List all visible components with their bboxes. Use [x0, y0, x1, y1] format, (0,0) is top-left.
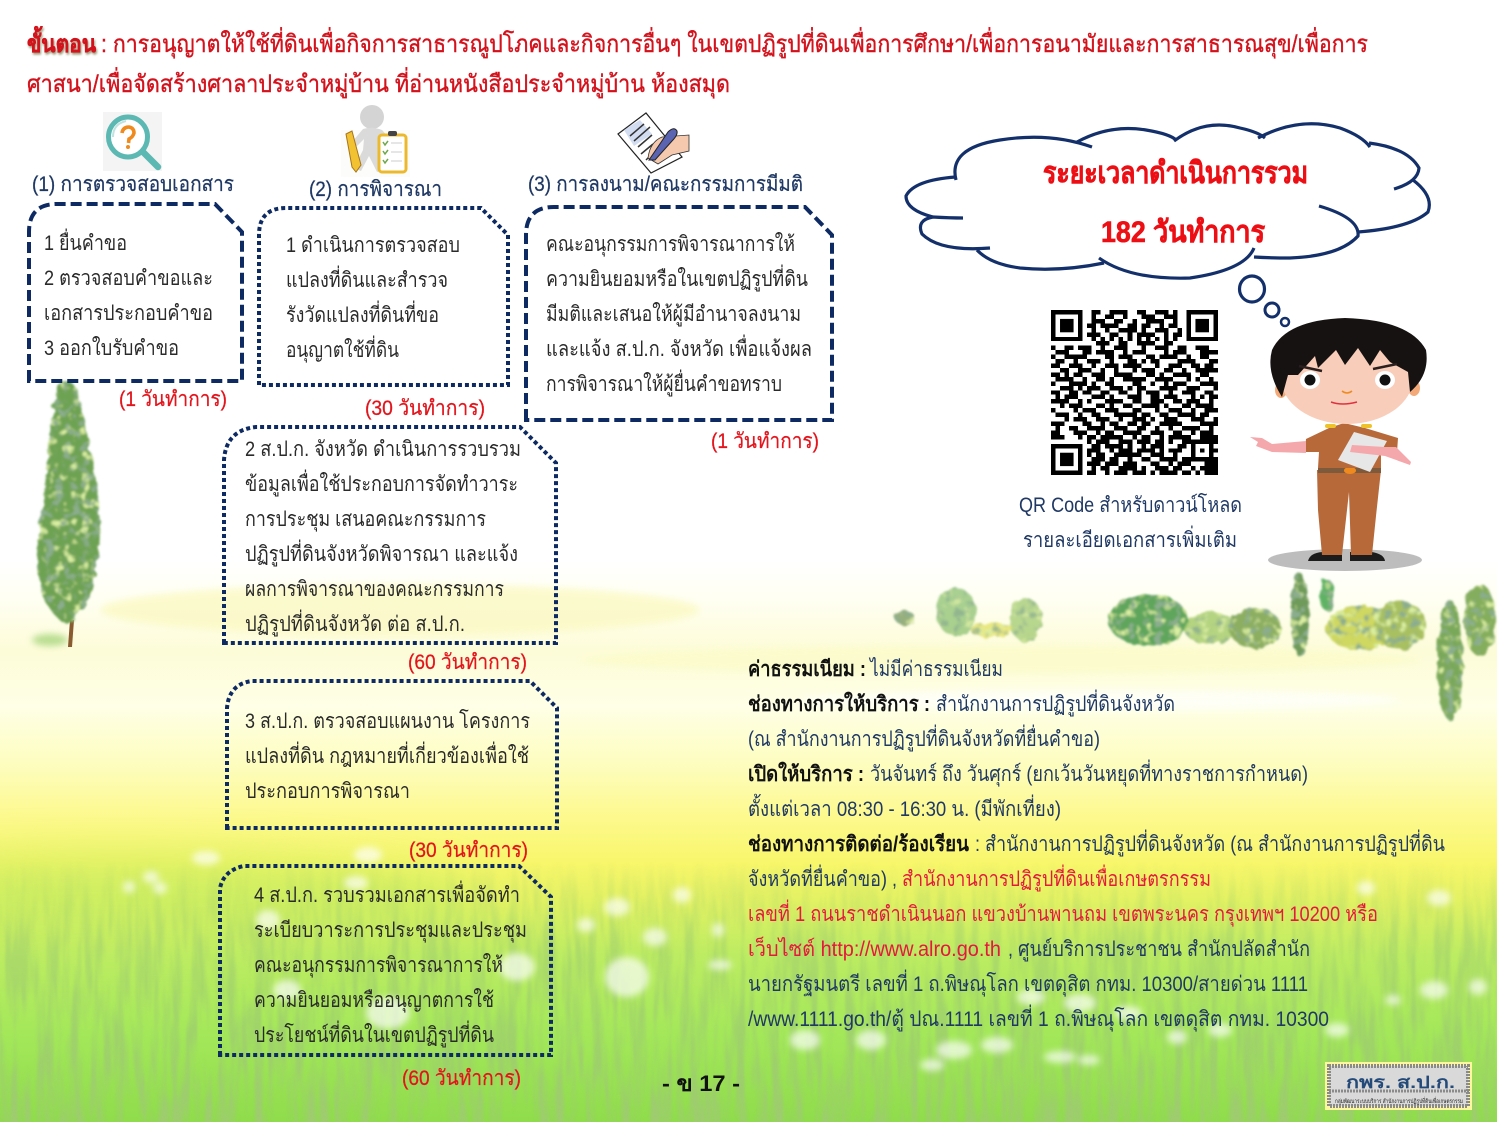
contact and complaints lines: นายกรัฐมนตรี เลขที่ 1 ถ.พิษณุโลก เขตดุสิต กทม. 10300/สายด่วน 1111 [748, 969, 1308, 997]
holding arm [1350, 445, 1411, 465]
sub-item 3 text: ประกอบการพิจารณา [245, 780, 410, 803]
panel: step 3 signing [526, 173, 832, 453]
service channel lines: สำนักงานการปฏิรูปที่ดินจังหวัด [936, 689, 1175, 717]
contact and complaints lines: ช่องทางการติดต่อ/ร้องเรียน [748, 832, 970, 856]
nose and mouth [1342, 391, 1352, 393]
face [1281, 332, 1413, 424]
step 1 box outline [29, 204, 242, 381]
step 1 text: 1 ยื่นคำขอ [44, 228, 127, 255]
QR caption: QR Code สำหรับดาวน์โหลด [1019, 493, 1242, 517]
paper [1338, 432, 1387, 472]
fee line: ค่าธรรมเนียม : [748, 657, 866, 681]
background: left cypress tree [32, 381, 100, 647]
contact and complaints lines: , ศูนย์บริการประชาชน สำนักปลัดสำนัก [1008, 937, 1310, 962]
ground shadow [1268, 549, 1422, 571]
icon: hand signing a document [618, 113, 689, 173]
sub-item 2 text: ผลการพิจารณาของคณะกรรมการ [245, 578, 504, 601]
callout: thought cloud with total duration [906, 124, 1429, 326]
cloud heading: ระยะเวลาดำเนินการรวม [1043, 157, 1308, 190]
step 1 heading: (1) การตรวจสอบเอกสาร [32, 173, 234, 196]
QR modules [1051, 312, 1218, 473]
step 1 text: เอกสารประกอบคำขอ [44, 302, 213, 325]
panel: step 2 sub-item ALRO review [227, 681, 557, 862]
cloud outline [906, 124, 1429, 278]
contact and complaints lines: เลขที่ 1 ถนนราชดำเนินนอก แขวงบ้านพานถม เขตพระนคร กรุงเทพฯ 10200 หรือ [748, 899, 1378, 927]
sub-item 3 text [245, 709, 530, 803]
contact and complaints lines [748, 829, 1445, 1032]
QR caption: รายละเอียดเอกสารเพิ่มเติม [1023, 525, 1237, 552]
sub-item 2 text: ปฏิรูปที่ดินจังหวัดพิจารณา และแจ้ง [245, 539, 518, 567]
fee line: ไม่มีค่าธรรมเนียม [868, 657, 1003, 681]
page number: - ข 17 - [662, 1071, 740, 1096]
step 3 text: มีมติและเสนอให้ผู้มีอำนาจลงนาม [546, 302, 801, 327]
sub-item 2 text: การประชุม เสนอคณะกรรมการ [245, 508, 486, 532]
sub-item 2 text: ข้อมูลเพื่อใช้ประกอบการจัดทำวาระ [245, 469, 518, 497]
sub-item 4 text: ความยินยอมหรืออนุญาตการใช้ [254, 988, 494, 1013]
sub-item 4 text: ประโยชน์ที่ดินในเขตปฏิรูปที่ดิน [254, 1020, 494, 1048]
cloud total: 182 วันทำการ [1101, 216, 1265, 249]
logo subtitle: กลุ่มพัฒนาระบบบริการ สำนักงานการปฏิรูปที่ดินเพื่อเกษตรกรรม [1335, 1097, 1463, 1105]
flowers [123, 847, 1487, 1071]
opening hours lines: ตั้งแต่เวลา 08:30 - 16:30 น. (มีพักเที่ยง) [748, 794, 1061, 821]
step 3 text: คณะอนุกรรมการพิจารณาการให้ [546, 232, 795, 257]
step 3 duration: (1 วันทำการ) [711, 430, 819, 453]
sub-item 3 duration: (30 วันทำการ) [409, 839, 528, 862]
thought bubbles [1240, 276, 1289, 326]
step 2 text: 1 ดำเนินการตรวจสอบ [286, 234, 460, 257]
sub-item 4 text [254, 880, 527, 1048]
trousers [1317, 470, 1381, 555]
step 3 text: ความยินยอมหรือในเขตปฏิรูปที่ดิน [546, 264, 808, 292]
contact and complaints lines: สำนักงานการปฏิรูปที่ดินเพื่อเกษตรกรรม [902, 864, 1211, 892]
logo stamp [1325, 1062, 1472, 1110]
hair [1270, 318, 1427, 397]
eyes [1299, 364, 1397, 389]
shoes [1308, 552, 1385, 561]
pointing arm [1250, 437, 1306, 453]
step 1 text: 3 ออกใบรับคำขอ [44, 336, 179, 360]
step 2 box outline [259, 208, 508, 385]
opening hours lines [748, 759, 1308, 821]
panel: step 1 document check [29, 173, 242, 411]
step 3 text [546, 232, 812, 397]
logo name: กพร. ส.ป.ก. [1346, 1073, 1455, 1092]
sub-item 3 text: แปลงที่ดิน กฎหมายที่เกี่ยวข้องเพื่อใช้ [245, 741, 529, 768]
step 2 duration: (30 วันทำการ) [365, 397, 485, 420]
fee line [748, 657, 1003, 681]
step 1 text: 2 ตรวจสอบคำขอและ [44, 267, 213, 290]
step 3 heading: (3) การลงนาม/คณะกรรมการมีมติ [528, 173, 803, 196]
sub-item 4 text: คณะอนุกรรมการพิจารณาการให้ [254, 953, 503, 978]
service channel lines: ช่องทางการให้บริการ : [748, 691, 930, 716]
step 3 text: และแจ้ง ส.ป.ก. จังหวัด เพื่อแจ้งผล [546, 334, 812, 361]
sub-item 2 text [245, 438, 521, 637]
title line 2: ศาสนา/เพื่อจัดสร้างศาลาประจำหมู่บ้าน ที่อ่านหนังสือประจำหมู่บ้าน ห้องสมุด [27, 67, 730, 99]
icon: magnifying glass [103, 112, 162, 171]
step 1 text [44, 228, 213, 360]
sub-item 4 text: 4 ส.ป.ก. รวบรวมเอกสารเพื่อจัดทำ [254, 880, 520, 907]
sub-item 4 text: ระเบียบวาระการประชุมและประชุม [254, 919, 527, 943]
step 2 text: รังวัดแปลงที่ดินที่ขอ [286, 300, 439, 327]
step 3 box outline [526, 207, 832, 420]
title line 1: : การอนุญาตให้ใช้ที่ดินเพื่อกิจการสาธารณูปโภคและกิจการอื่นๆ ในเขตปฏิรูปที่ดินเพื่อการศึกษา/เพื่อการอนามัยและการสาธารณสุข/เพื่อการ [101, 27, 1368, 59]
panel: step 2 sub-item provincial ALRO [224, 427, 556, 674]
opening hours lines: วันจันทร์ ถึง วันศุกร์ (ยกเว้นวันหยุดที่ทางราชการกำหนด) [870, 759, 1308, 787]
sub-item 3 box outline [227, 681, 557, 828]
QR caption [1019, 493, 1242, 552]
step 1 duration: (1 วันทำการ) [119, 388, 227, 411]
contact and complaints lines: จังหวัดที่ยื่นคำขอ) , [748, 864, 897, 891]
ears [1275, 382, 1287, 398]
QR code [1019, 312, 1242, 552]
opening hours lines: เปิดให้บริการ : [748, 761, 864, 786]
sub-item 3 text: 3 ส.ป.ก. ตรวจสอบแผนงาน โครงการ [245, 709, 530, 733]
background: meadow [0, 578, 1497, 1122]
service channel lines [748, 689, 1175, 752]
text block: service details [748, 657, 1445, 1032]
icon: person with pencil and checklist [341, 105, 410, 177]
background: horizon trees and shrubs [895, 573, 1496, 720]
sub-item 2 duration: (60 วันทำการ) [408, 651, 527, 674]
sub-item 2 text: ปฏิรูปที่ดินจังหวัด ต่อ ส.ป.ก. [245, 609, 465, 637]
panel: step 2 consideration [259, 178, 508, 420]
sub-item 2 box outline [224, 427, 556, 643]
step 2 text: อนุญาตใช้ที่ดิน [286, 335, 399, 363]
sub-item 2 text: 2 ส.ป.ก. จังหวัด ดำเนินการรวบรวม [245, 438, 521, 461]
contact and complaints lines: เว็บไซต์ http://www.alro.go.th [748, 935, 1001, 961]
panel: step 2 sub-item meeting agenda [220, 866, 551, 1090]
service channel lines: (ณ สำนักงานการปฏิรูปที่ดินจังหวัดที่ยื่นคำขอ) [748, 724, 1100, 752]
icon: officer cartoon character [1250, 318, 1427, 571]
contact and complaints lines: /www.1111.go.th/ตู้ ปณ.1111 เลขที่ 1 ถ.พิษณุโลก เขตดุสิต กทม. 10300 [748, 1004, 1329, 1032]
belt [1318, 468, 1381, 473]
shirt [1305, 423, 1398, 468]
sub-item 4 box outline [220, 866, 551, 1055]
title lead word: ขั้นตอน [27, 25, 97, 58]
title [27, 25, 1368, 99]
step 2 text [286, 234, 460, 363]
step 2 heading: (2) การพิจารณา [309, 178, 442, 201]
step 3 text: การพิจารณาให้ผู้ยื่นคำขอทราบ [546, 369, 782, 397]
sub-item 4 duration: (60 วันทำการ) [402, 1067, 521, 1090]
step 2 text: แปลงที่ดินและสำรวจ [286, 265, 448, 292]
